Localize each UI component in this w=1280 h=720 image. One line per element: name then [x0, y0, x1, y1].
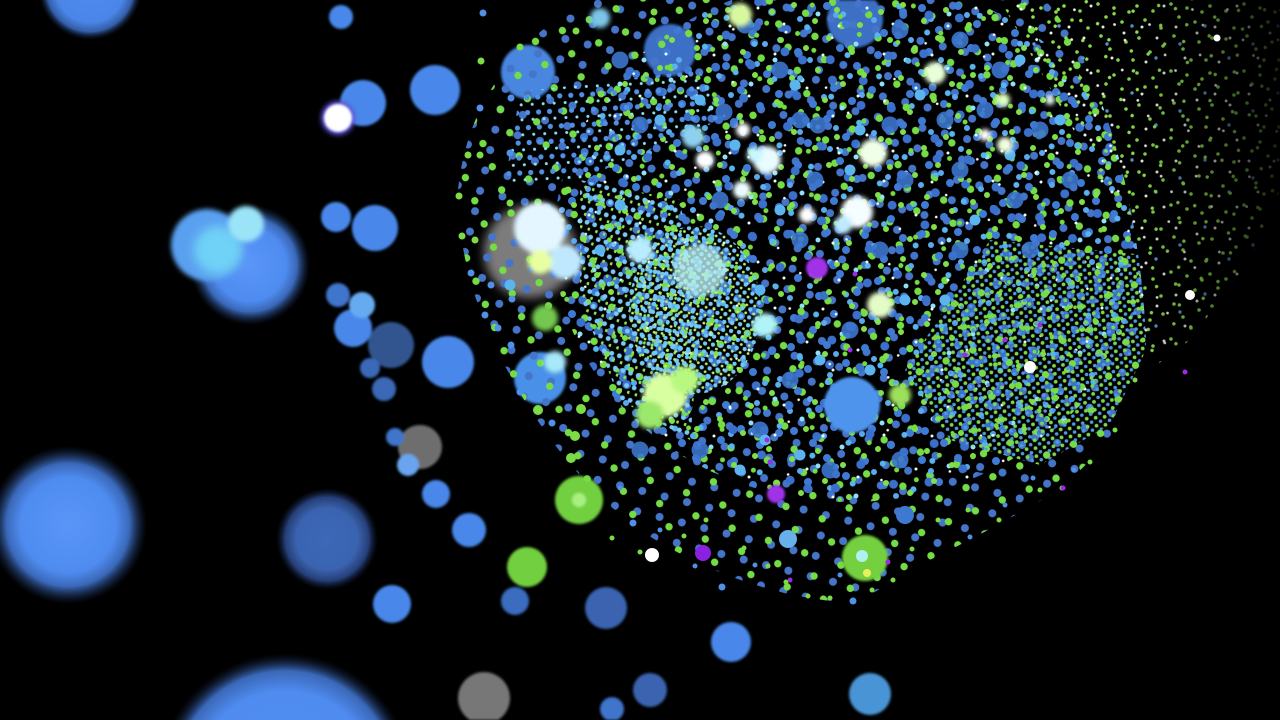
group: blue particle clumps in the sphere [510, 25, 1070, 470]
group: dust particles dispersing to the right [1000, 0, 1280, 375]
group: large blurred bokeh circles on the left [0, 0, 414, 720]
icon: white highlight bokeh [321, 101, 355, 135]
group: large bokeh behind the sphere lattice [484, 0, 883, 404]
group: hand-placed rim dots of the sphere [459, 12, 1143, 601]
group: white particle clusters [514, 3, 1055, 429]
group: particle sphere dot lattice [450, 0, 1150, 610]
group: foreground bokeh and bright particles [645, 34, 1220, 581]
group: medium bokeh circles trailing the sphere [321, 5, 891, 720]
group: purple accent particles [695, 257, 1185, 580]
